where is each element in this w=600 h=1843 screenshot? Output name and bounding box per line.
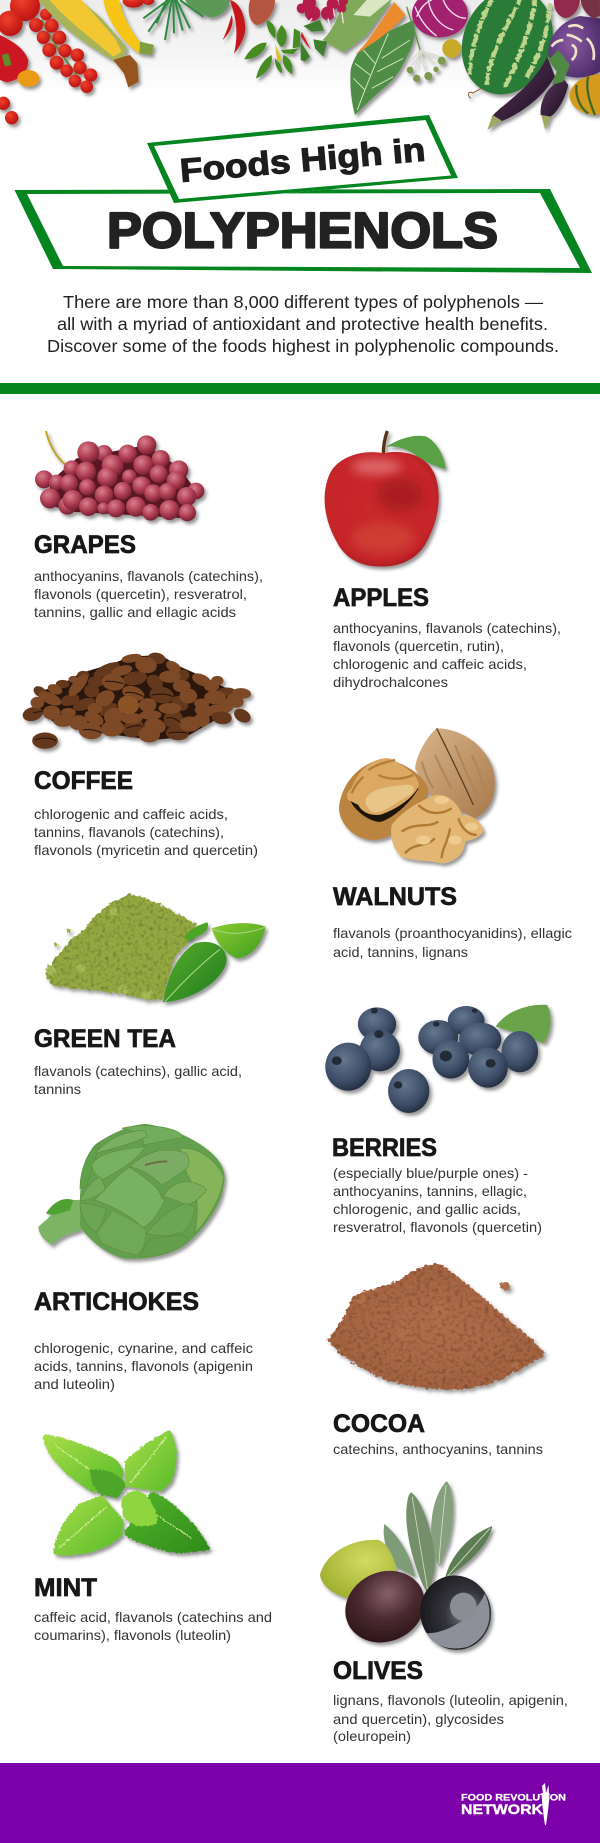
heading: grapes: GRAPES [34,531,136,559]
illustration: right vegetables [297,0,600,130]
heading: Foods High in: Foods High in [178,131,427,189]
illustration: vegetables header [0,0,600,130]
compounds: apples: flavonols (quercetin, rutin), [333,638,504,654]
icon: potato [249,0,275,25]
heading: coffee: COFFEE [34,767,133,795]
compounds: olives [333,1692,568,1744]
icon: grapes [35,431,204,521]
panel: walnuts [333,728,572,960]
compounds: mint: caffeic acid, flavanols (catechins and [34,1609,272,1625]
illustration: left vegetables [0,0,300,124]
panel: olives [320,1481,568,1744]
intro text: There are more than 8,000 different types of polyphenols — [63,292,544,312]
icon: green herb [143,0,203,40]
icon: yellow tomato [17,70,39,87]
icon: green leaves and pepper [244,20,300,79]
heading: apples: APPLES [333,584,429,612]
compounds: berries: anthocyanins, tannins, ellagic, [333,1183,527,1199]
compounds: apples: anthocyanins, flavanols (catechins), [333,620,561,636]
icon: mint leaves [43,1430,210,1555]
compounds: green tea: tannins [34,1081,81,1097]
compounds: mint [34,1609,272,1643]
compounds: grapes [34,568,263,620]
heading: walnuts: WALNUTS [333,883,457,911]
compounds: coffee: chlorogenic and caffeic acids, [34,806,228,822]
icon: eggplants [487,57,568,130]
icon: carrot [355,2,405,55]
compounds: olives: lignans, flavonols (luteolin, apigenin, [333,1692,568,1708]
logo: Food Revolution Network: FOOD REVOLUTION [461,1792,566,1804]
heading: olives: OLIVES [333,1657,423,1685]
panel: berries [325,1005,551,1235]
icon: purple potatoes [554,0,600,18]
icon: broccoli [185,0,230,17]
icon: dill flower [407,7,446,82]
compounds: walnuts: acid, tannins, lignans [333,944,468,960]
compounds: mint: coumarins), flavonols (luteolin) [34,1627,231,1643]
compounds: berries: chlorogenic, and gallic acids, [333,1201,521,1217]
compounds: green tea [34,1063,242,1097]
compounds: apples [333,620,561,690]
intro text [47,292,559,356]
compounds: grapes: tannins, gallic and ellagic acids [34,604,236,620]
icon: small leaves and chili [301,20,327,62]
title [14,115,592,273]
icon: red pepper [0,35,28,82]
banner: upper green frame [147,115,458,203]
compounds: apples: chlorogenic and caffeic acids, [333,656,527,672]
icon: orange squash [569,74,600,115]
icon: yellow squash [103,0,154,55]
compounds: walnuts [333,925,572,960]
intro text: all with a myriad of antioxidant and protective health benefits. [57,314,548,334]
compounds: berries: (especially blue/purple ones) - [333,1165,528,1181]
compounds: coffee: tannins, flavanols (catechins), [34,824,224,840]
icon: blueberries [325,1005,551,1113]
compounds: artichokes: and luteolin) [34,1376,115,1392]
panel: grapes [34,431,263,620]
heading: cocoa: COCOA [333,1410,425,1438]
icon: kohlrabi [548,16,600,85]
icon: coffee beans [22,652,252,748]
panel: mint [34,1430,272,1643]
intro text: Discover some of the foods highest in polyphenolic compounds. [47,336,559,356]
panel: artichokes [34,1124,253,1392]
logo: Food Revolution Network: NETWORK [461,1801,543,1817]
compounds: berries [333,1165,542,1235]
icon: big green leaf [350,20,415,115]
icon: corn [38,0,139,87]
icon: matcha powder [45,894,197,1000]
footer bar [0,1763,600,1843]
panel: green tea [34,894,266,1097]
compounds: coffee: flavonols (myricetin and quercetin) [34,842,258,858]
icon: radicchio [412,0,468,37]
heading: mint: MINT [34,1574,97,1602]
icon: cabbage leaf [323,0,392,52]
compounds: artichokes: chlorogenic, cynarine, and caffeic [34,1340,253,1356]
icon: chilies [223,0,245,54]
icon: cocoa powder [327,1264,545,1390]
compounds: grapes: flavonols (quercetin), resveratrol, [34,586,247,602]
icon: artichoke [38,1124,225,1259]
icon: tea leaves [163,922,266,1002]
icon: olives and leaves [320,1481,499,1658]
panel: apples [325,431,561,690]
heading: green tea: GREEN TEA [34,1025,176,1053]
logo: Food Revolution Network [461,1783,566,1825]
banner: lower green frame [14,189,592,273]
compounds: cocoa: catechins, anthocyanins, tannins [333,1441,543,1457]
heading: POLYPHENOLS: POLYPHENOLS [107,202,498,258]
compounds: berries: resveratrol, flavonols (quercetin) [333,1219,542,1235]
heading: berries: BERRIES [332,1134,437,1162]
panel: cocoa [327,1264,545,1457]
heading: artichokes: ARTICHOKES [34,1288,199,1316]
panel: coffee [22,652,258,858]
compounds: grapes: anthocyanins, flavanols (catechins), [34,568,263,584]
icon: apple [325,431,446,567]
compounds: olives: (oleuropein) [333,1728,411,1744]
compounds: walnuts: flavanols (proanthocyanidins), ellagic [333,925,572,941]
compounds: olives: and quercetin), glycosides [333,1711,504,1727]
icon: small tomato [442,39,461,58]
icon: cherry tomato vine [29,8,97,93]
divider bar [0,383,600,394]
compounds: green tea: flavanols (catechins), gallic acid, [34,1063,242,1079]
icon: radishes [297,0,348,30]
compounds: artichokes [34,1340,253,1392]
compounds: apples: dihydrochalcones [333,674,448,690]
icon: carrot [542,1783,550,1825]
icon: walnuts [339,728,495,863]
icon: watermelon [446,0,568,108]
compounds: artichokes: acids, tannins, flavonols (apigenin [34,1358,253,1374]
icon: matcha powder and leaves [45,894,266,1002]
compounds: coffee [34,806,258,858]
icon: tomatoes [0,0,154,124]
